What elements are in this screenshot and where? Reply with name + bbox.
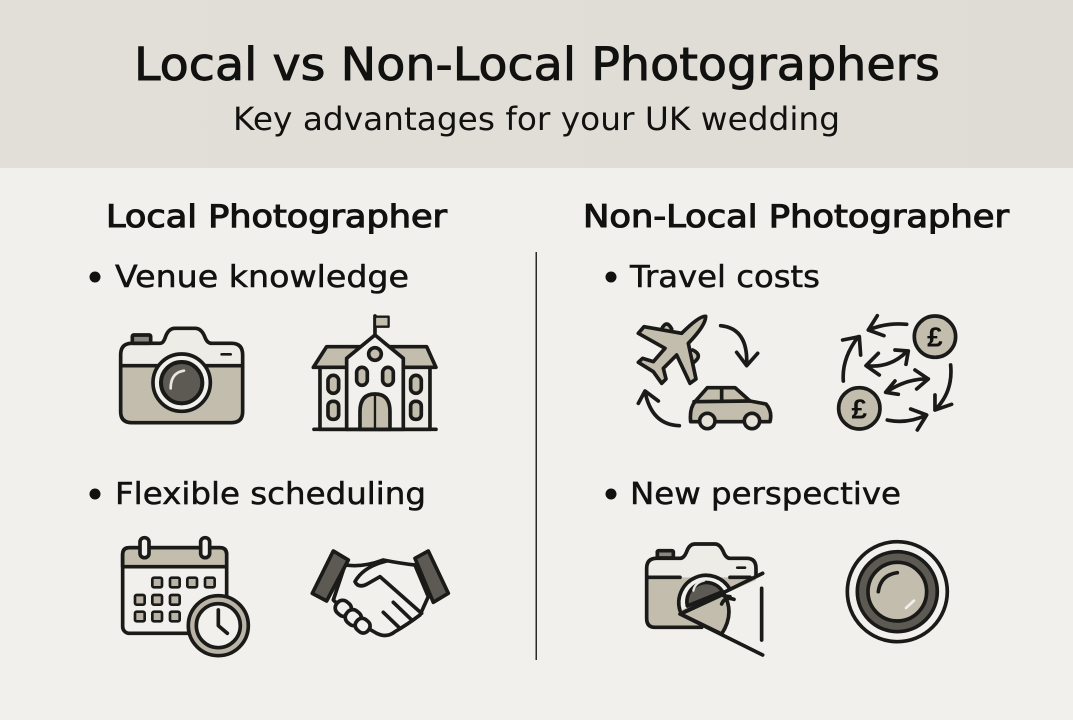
icon: venue building xyxy=(313,316,436,429)
bullet: venue knowledge: Venue knowledge xyxy=(115,260,409,295)
icon: calendar with clock xyxy=(123,538,248,656)
icon: lens xyxy=(847,542,947,642)
icon: handshake xyxy=(312,551,448,635)
icon: camera xyxy=(121,328,243,423)
icon: pound coins and arrows: £ xyxy=(852,393,868,424)
icon: camera with viewing angle xyxy=(647,544,763,655)
bullet: flexible scheduling: Flexible scheduling xyxy=(115,477,426,512)
subtitle: Key advantages for your UK wedding xyxy=(233,100,840,138)
panel: local photographer xyxy=(90,199,448,656)
heading: non-local photographer: Non-Local Photographer xyxy=(583,199,1009,235)
bullet: travel costs: Travel costs xyxy=(629,260,820,295)
icon: plane and car travel cycle xyxy=(638,316,771,429)
heading: local photographer: Local Photographer xyxy=(106,199,447,235)
panel: non-local photographer xyxy=(583,199,1009,655)
title: Local vs Non-Local Photographers xyxy=(134,38,940,91)
header band xyxy=(0,0,1073,168)
icon: pound coins and arrows xyxy=(839,316,956,430)
icon: pound coins and arrows: £ xyxy=(927,322,943,353)
bullet: new perspective: New perspective xyxy=(630,477,901,512)
